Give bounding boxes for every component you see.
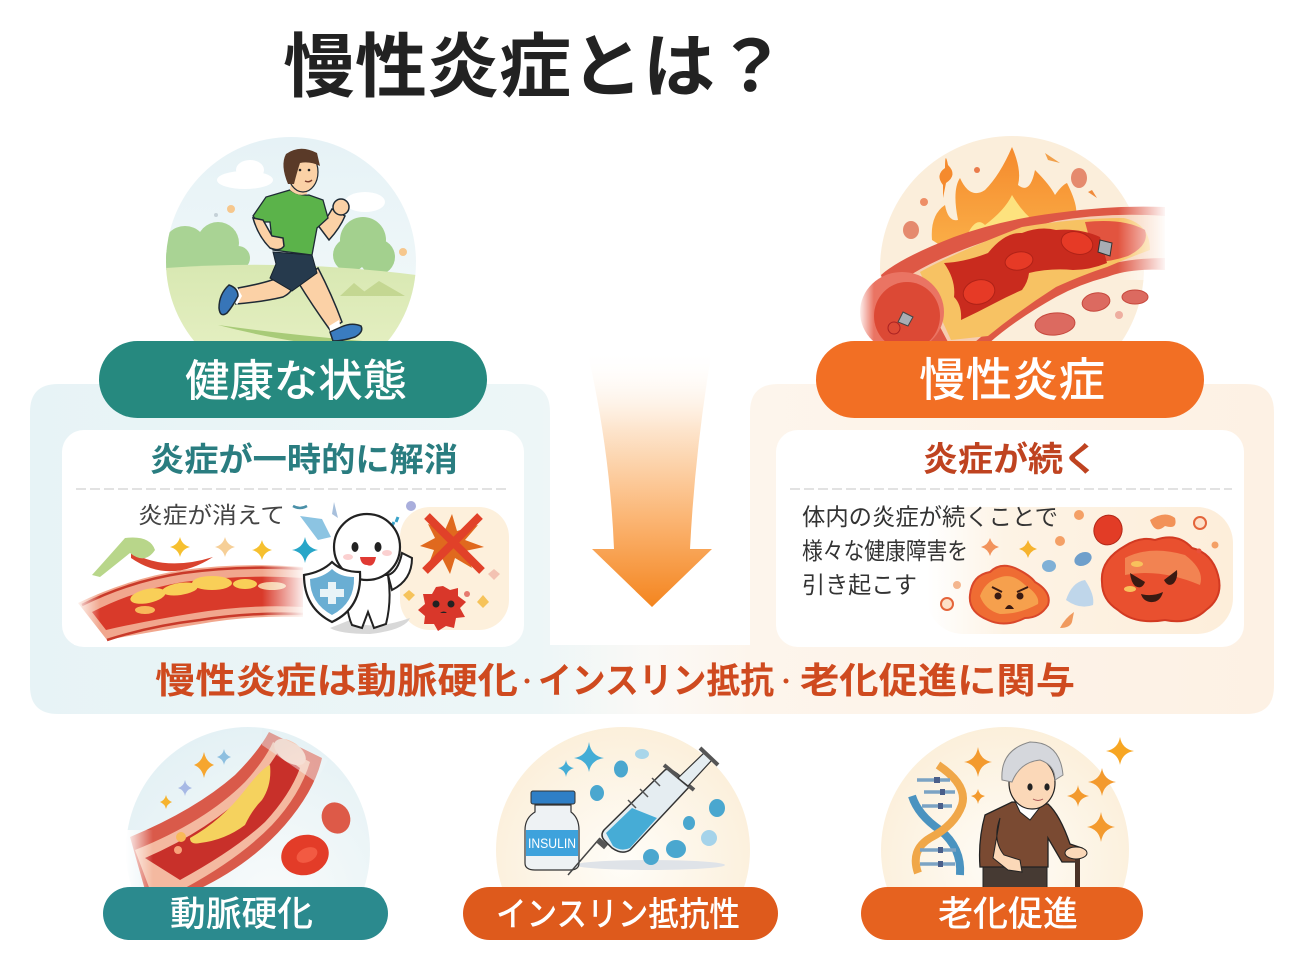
callout: related conditions: 老化促進に関与: [800, 660, 1075, 701]
front leg: [298, 268, 342, 330]
free blood cells: [1034, 290, 1148, 337]
icon: large angry cell: [1102, 537, 1220, 621]
pill: atherosclerosis: [103, 887, 388, 940]
shirt: [253, 190, 328, 255]
icon: elderly man: [980, 742, 1087, 889]
illustration: inflamed blood vessel: [858, 136, 1168, 400]
illustration: insulin vial and syringe: [496, 727, 750, 887]
arrow: progression downward: [587, 350, 712, 607]
pill: chronic inflammation: [816, 341, 1204, 418]
vial: INSULIN: [528, 836, 576, 851]
pill: insulin resistance: [463, 887, 778, 940]
pill: atherosclerosis: 動脈硬化: [170, 895, 313, 934]
pill: accelerated aging: 老化促進: [938, 895, 1078, 934]
title: 慢性炎症とは？: [283, 28, 787, 106]
illustration: aging elder and DNA: [881, 727, 1134, 888]
text block: 炎症が消えて: [138, 502, 285, 528]
text block: 様々な健康障害を: [802, 538, 968, 564]
text block: 体内の炎症が続くことで: [802, 504, 1058, 530]
icon: drops and sparkles: [558, 742, 725, 865]
panel: temporary inflammation card: [62, 430, 524, 647]
shorts: [270, 252, 317, 291]
heading: 炎症が一時的に解消: [150, 441, 458, 478]
flame: [932, 147, 1076, 258]
icon: small diamonds: [403, 569, 500, 608]
text block: [802, 504, 1058, 598]
callout: related conditions: [155, 660, 1075, 701]
vial: [525, 791, 579, 870]
icon: smiling shield character: [304, 514, 412, 634]
red blood cells in lumen: [960, 228, 1095, 308]
icon: DNA: [912, 765, 963, 875]
back leg: [236, 278, 293, 304]
far arm: [317, 209, 345, 240]
heading: 炎症が続く: [923, 440, 1098, 479]
illustration: healthy runner: [166, 137, 416, 341]
icon: small red germ: [418, 586, 470, 631]
vessel wall: [881, 207, 1165, 344]
illustration: atherosclerosis: [128, 727, 370, 887]
icon: small angry cell: [970, 566, 1049, 624]
pill: healthy state: [99, 341, 487, 418]
panel: background comparison frame: [30, 384, 1274, 714]
icon: spray brush: [293, 501, 416, 540]
near arm: [253, 218, 284, 250]
text block: 引き起こす: [802, 572, 917, 598]
pill: chronic inflammation: 慢性炎症: [919, 354, 1105, 406]
syringe: [568, 748, 718, 875]
icon: sparkles: [170, 537, 318, 563]
pill: accelerated aging: [861, 887, 1143, 940]
vessel end cap: [860, 272, 944, 352]
icon: sparkles: [981, 538, 1037, 558]
pill: insulin resistance: インスリン抵抗性: [496, 896, 740, 934]
icon: free cells and drops: [941, 510, 1218, 628]
panel: persistent inflammation card: [776, 430, 1244, 647]
icon: crossed-out germ: [420, 514, 484, 574]
icon: healing vessel: [74, 538, 307, 645]
plaque and lumen: [920, 218, 1150, 340]
head: [290, 180, 308, 195]
icon: sparkles: [964, 737, 1134, 842]
callout: related conditions: インスリン抵抗: [538, 660, 774, 701]
pill: healthy state: 健康な状態: [185, 357, 407, 406]
callout: related conditions: 慢性炎症は動脈硬化: [155, 660, 518, 701]
